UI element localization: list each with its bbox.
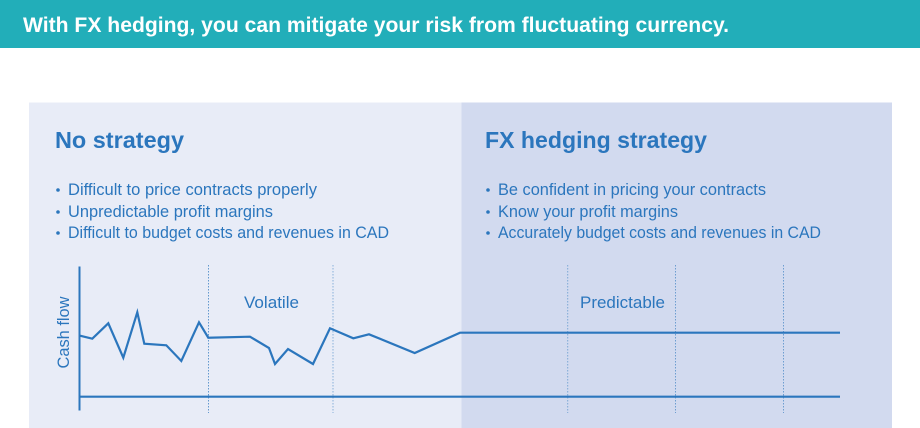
bullet list: FX hedging strategy: Be confident in pricing your contracts bbox=[498, 181, 766, 199]
cash flow line bbox=[80, 312, 840, 364]
period dividers bbox=[208, 265, 784, 413]
bullet list: FX hedging strategy bbox=[486, 181, 821, 242]
bullet list: no strategy: Difficult to budget costs and revenues in CAD bbox=[68, 224, 389, 242]
label: predictable: Predictable bbox=[580, 294, 665, 312]
panel: FX hedging strategy bbox=[462, 102, 892, 428]
heading: no strategy: No strategy bbox=[55, 127, 184, 153]
bullet list: FX hedging strategy: Know your profit margins bbox=[498, 203, 678, 221]
bullet list: FX hedging strategy: Accurately budget costs and revenues in CAD bbox=[498, 224, 821, 242]
chart: cash flow over time bbox=[55, 265, 840, 413]
header banner bbox=[0, 0, 920, 48]
title: With FX hedging, you can mitigate your risk from fluctuating currency. bbox=[23, 14, 729, 37]
x axis bbox=[79, 396, 840, 398]
panel: no strategy bbox=[29, 102, 462, 428]
label: volatile: Volatile bbox=[244, 294, 299, 312]
y axis label: Cash flow bbox=[55, 296, 73, 368]
heading: FX hedging strategy: FX hedging strategy bbox=[485, 127, 707, 153]
y axis bbox=[78, 266, 80, 410]
bullet list: no strategy: Unpredictable profit margins bbox=[68, 203, 273, 221]
bullet list: no strategy bbox=[56, 181, 389, 242]
bullet list: no strategy: Difficult to price contracts properly bbox=[68, 181, 318, 199]
